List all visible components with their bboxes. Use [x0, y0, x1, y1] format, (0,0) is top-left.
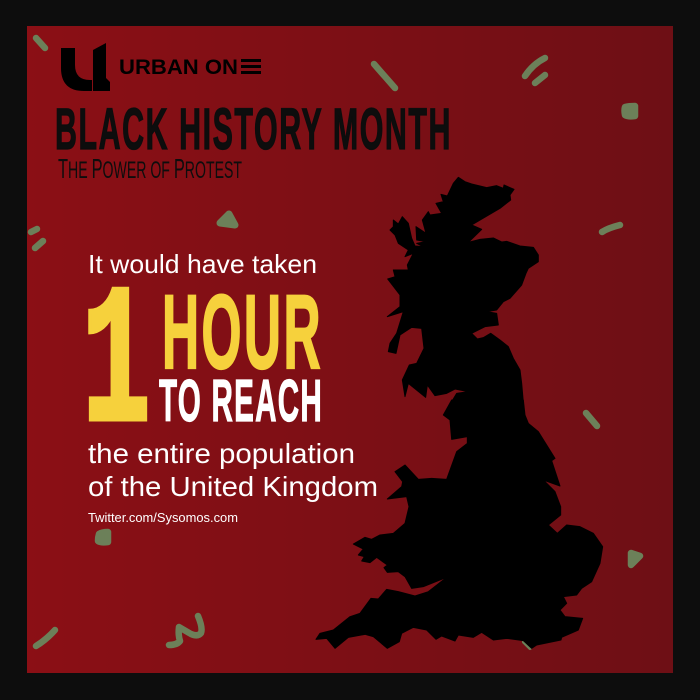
infographic canvas: HOUR: [162, 274, 323, 391]
logo: Urban One: [61, 43, 261, 91]
intro text: It would have taken: [88, 249, 317, 279]
closing text: [88, 438, 378, 502]
map of the United Kingdom: [316, 177, 603, 648]
logo: Urban One: URBAN ON: [119, 56, 238, 79]
closing text: of the United Kingdom: [88, 471, 378, 502]
TO REACH: TO REACH: [159, 368, 323, 434]
decorative green confetti: [31, 38, 640, 648]
source: Twitter.com/Sysomos.com: [88, 510, 238, 525]
big number 1: 1: [82, 256, 151, 479]
closing text: the entire population: [88, 438, 355, 469]
subtitle: THE POWER OF PROTEST: [58, 153, 242, 184]
